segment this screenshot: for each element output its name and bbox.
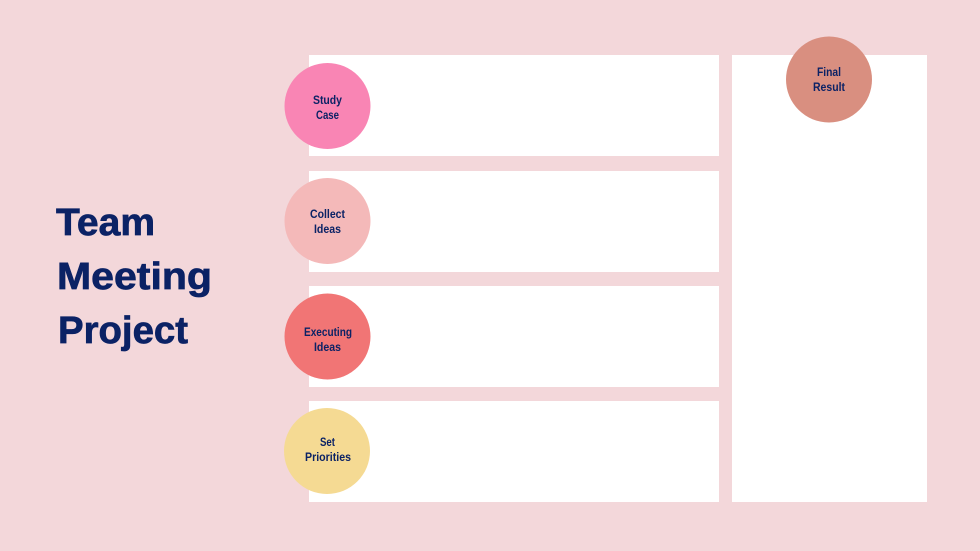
- badge: executing ideas: Ideas: [314, 340, 341, 354]
- panel: final result column: [732, 55, 927, 502]
- title: [56, 202, 212, 352]
- badge: study case: Study: [313, 93, 342, 107]
- badge: collect ideas: Ideas: [314, 222, 341, 236]
- title: Project: [58, 310, 188, 352]
- badge: collect ideas: [284, 178, 370, 264]
- title: Meeting: [57, 256, 212, 298]
- badge: final result: Final: [817, 65, 841, 79]
- badge: executing ideas: [284, 294, 370, 380]
- badge: study case: Case: [316, 108, 339, 122]
- panel: set priorities row: [309, 401, 719, 502]
- panel: executing ideas row: [309, 286, 719, 387]
- badge: final result: Result: [813, 80, 845, 94]
- badge: set priorities: [284, 408, 370, 494]
- panel: collect ideas row: [309, 171, 719, 272]
- badge: final result: [786, 36, 872, 122]
- badge: collect ideas: Collect: [310, 207, 345, 221]
- title: Team: [56, 202, 155, 244]
- badge: executing ideas: Executing: [304, 325, 352, 339]
- badge: study case: [284, 63, 370, 149]
- panel: study case row: [309, 55, 719, 156]
- badge: set priorities: Priorities: [305, 450, 351, 464]
- badge: set priorities: Set: [320, 435, 335, 449]
